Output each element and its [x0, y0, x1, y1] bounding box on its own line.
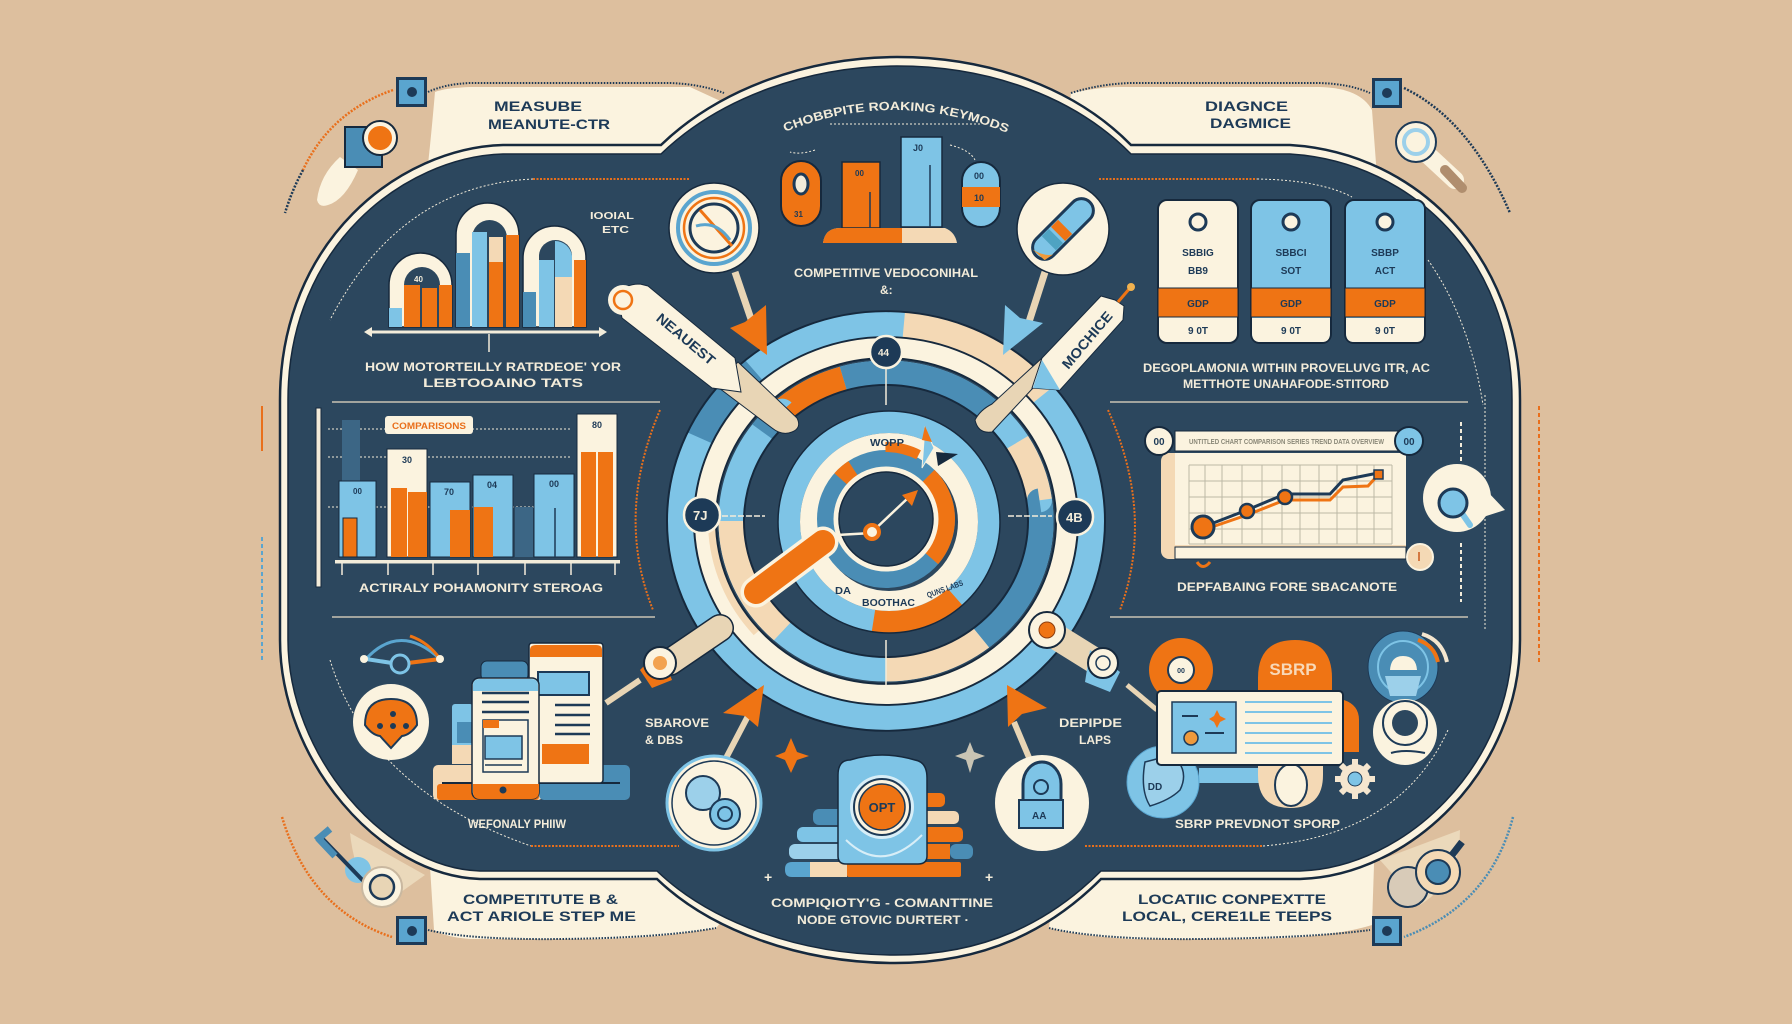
arc heading: CHOBBPITE ROAKING KEYMODS — [784, 102, 1009, 132]
label: ideal etc: IOOIAL — [590, 211, 634, 222]
card 1: BB9 — [1188, 266, 1208, 277]
banner: diagnose — [1060, 83, 1378, 190]
lock circle — [995, 755, 1089, 851]
blue circle: DD — [1148, 782, 1162, 793]
trend lines — [1203, 473, 1378, 527]
lower arrow: right — [1007, 685, 1047, 760]
arch 3 — [523, 226, 586, 327]
tag handle — [715, 362, 799, 433]
badge: right: 4B — [1066, 510, 1083, 525]
grid — [1189, 465, 1392, 544]
arch bar chart — [364, 203, 607, 352]
badge: top — [870, 336, 902, 405]
side accent: left — [261, 406, 263, 663]
caption: cards: METTHOTE UNAHAFODE-STITORD — [1183, 377, 1389, 391]
stacked card: opt: OPT — [869, 800, 895, 815]
card 1: 9 0T — [1188, 326, 1208, 337]
gauge icon — [360, 636, 444, 673]
ring labels: DA — [835, 586, 851, 597]
ring 2 — [640, 286, 1132, 756]
corner icon: bottom right gear — [1380, 830, 1462, 907]
caption: bottom centre: COMPIQIOTY'G - COMANTTINE — [771, 896, 993, 910]
pill: blue: 10 — [974, 193, 984, 203]
serp illustration — [1127, 631, 1447, 818]
card 2: GDP — [1280, 299, 1302, 310]
ring 1 — [614, 260, 1158, 782]
caption: bottom centre — [764, 869, 993, 927]
inner flag arrow — [922, 426, 958, 468]
tag: measure — [608, 284, 799, 433]
corner icon: top right magnifier — [1396, 122, 1462, 188]
arch 1 — [389, 253, 452, 327]
caption: serp: SBRP PREVDNOT SPORP — [1175, 817, 1340, 831]
mini chart: top centre — [781, 124, 1000, 243]
caption: bottom centre: + — [764, 869, 772, 885]
caption: arch chart: LEBTOOAINO TATS — [423, 376, 583, 390]
caption: cards — [1143, 361, 1430, 391]
gear — [1335, 759, 1375, 799]
tag: lower right — [1029, 612, 1157, 710]
chip: left — [1145, 427, 1173, 455]
orange handle — [756, 542, 823, 592]
top cards — [1158, 200, 1425, 343]
banner text: competitive: COMPETITUTE B & — [463, 891, 618, 907]
bar: blue — [901, 137, 942, 227]
magnifier: top left — [669, 183, 767, 355]
bar 2 — [387, 449, 427, 557]
lower arrow: left — [723, 685, 764, 760]
card — [838, 755, 927, 864]
star: pale — [955, 742, 985, 773]
outer rings — [614, 260, 1158, 782]
bar 6 — [577, 414, 617, 557]
bar 4 — [473, 475, 513, 557]
ring outlines — [667, 311, 1105, 731]
banner text: measure — [488, 98, 610, 132]
tag text: NEAUEST — [653, 310, 719, 369]
caption: line chart: DEPFABAING FORE SBACANOTE — [1177, 580, 1397, 594]
text: DEPIPDE — [1059, 716, 1122, 730]
chart label: COMPARISONS — [392, 421, 466, 431]
caption: top centre — [794, 266, 978, 297]
ring 3 — [667, 311, 1105, 731]
chip: lower — [1407, 544, 1433, 570]
captions: lower arrows: & DBS — [645, 733, 683, 747]
capsule circle: top right — [1003, 183, 1109, 355]
corner square: bottom right — [1372, 916, 1402, 946]
pill: orange: 31 — [794, 210, 803, 219]
bar 1: 00 — [353, 487, 362, 496]
serp dome — [1258, 640, 1332, 692]
ring labels: BOOTHAC — [862, 598, 915, 609]
banner text: diagnose: DIAGNCE — [1205, 98, 1288, 114]
ring labels: QUNS LABS — [926, 578, 965, 600]
caption: bottom centre: + — [985, 869, 993, 885]
bar 2: 30 — [402, 455, 412, 465]
caption: cards: DEGOPLAMONIA WITHIN PROVELUVG ITR, AC — [1143, 361, 1430, 375]
inner rings — [748, 381, 1030, 663]
left stack — [785, 809, 961, 877]
card 3: GDP — [1374, 299, 1396, 310]
caption: top centre: &: — [880, 283, 893, 297]
caption: bar chart: ACTIRALY POHAMONITY STEROAG — [359, 581, 603, 595]
tag: lower left — [606, 628, 720, 703]
banner text: competitive — [447, 891, 636, 924]
pill: orange — [781, 161, 821, 226]
base — [433, 765, 630, 800]
bar: blue: J0 — [913, 143, 923, 153]
card 1: SBBIG — [1182, 248, 1214, 259]
card 3: SBBP — [1371, 248, 1399, 259]
line chart card — [1145, 427, 1433, 570]
tag: monitor — [975, 283, 1135, 432]
banner text: measure: MEANUTE-CTR — [488, 116, 610, 132]
label: ideal etc: ETC — [602, 225, 629, 236]
ring badge — [1373, 699, 1437, 765]
badge: top: 44 — [878, 348, 890, 359]
banner text: measure: MEASUBE — [494, 98, 582, 114]
banner: measure — [425, 83, 740, 190]
chart label — [385, 416, 473, 434]
text: LAPS — [1079, 733, 1111, 747]
banner text: local: LOCATIIC CONPEXTTE — [1138, 891, 1326, 907]
star: orange — [775, 738, 809, 773]
gauge ring diagram — [614, 260, 1158, 782]
corner icon: bottom left wrench — [314, 826, 425, 907]
card 2: SOT — [1281, 266, 1301, 277]
badge: left: 7J — [693, 508, 707, 523]
captions: lower arrows — [645, 716, 709, 747]
bar: orange: 00 — [855, 169, 864, 178]
card 3 — [1345, 200, 1425, 343]
dial pointer — [837, 490, 918, 539]
card 2: SBBCI — [1275, 248, 1307, 259]
tag text: MOCHICE — [1058, 308, 1116, 372]
side accent: right — [1538, 406, 1540, 663]
corner square: top left — [396, 77, 427, 107]
corner square: top right — [1372, 78, 1402, 108]
base — [823, 228, 957, 243]
right stack — [920, 793, 973, 859]
caption: top centre: COMPETITIVE VEDOCONIHAL — [794, 266, 978, 280]
lock circle: AA — [1032, 811, 1046, 822]
blue circle — [1127, 746, 1199, 818]
tablet — [529, 643, 603, 783]
card 3: ACT — [1375, 266, 1395, 277]
label: ideal etc — [590, 211, 634, 236]
main panel — [280, 57, 1520, 963]
banner text: diagnose: DAGMICE — [1210, 115, 1291, 131]
tag body — [1032, 296, 1124, 390]
device illustration — [433, 643, 630, 800]
markers — [1192, 516, 1214, 538]
corner arcs — [282, 88, 1513, 937]
bar 1 — [339, 481, 376, 557]
bar chart: left — [328, 414, 620, 575]
banner: competitive — [428, 835, 740, 939]
caption: arch chart: HOW MOTORTEILLY RATRDEOE' YOR — [365, 360, 621, 374]
banner text: local: LOCAL, CERE1LE TEEPS — [1122, 908, 1332, 924]
caption: bottom centre: NODE GTOVIC DURTERT · — [797, 913, 969, 927]
chip: right: 00 — [1403, 437, 1415, 448]
bar 3: 70 — [444, 487, 454, 497]
ring labels — [835, 438, 965, 609]
bar 3 — [430, 482, 470, 557]
orange circle: 00 — [1177, 668, 1185, 675]
tag handle — [975, 358, 1042, 432]
corner icon: top left — [317, 121, 397, 206]
dashed guide lines — [316, 179, 1485, 846]
axis — [364, 327, 607, 352]
banner text: local — [1122, 891, 1332, 924]
banner text: competitive: ACT ARIOLE STEP ME — [447, 908, 636, 924]
serp panel — [1157, 691, 1343, 765]
pill: blue — [962, 162, 1000, 227]
bar 5: 00 — [549, 479, 559, 489]
card 2 — [1251, 200, 1331, 343]
chip: left: 00 — [1153, 437, 1165, 448]
banner: local — [1049, 835, 1375, 939]
card 1: GDP — [1187, 299, 1209, 310]
lens circle — [667, 756, 761, 850]
bar 6: 80 — [592, 420, 602, 430]
orange circle — [1149, 638, 1213, 702]
bar: orange — [842, 162, 880, 228]
serp dome: SBRP — [1269, 660, 1317, 679]
card 1 — [1158, 200, 1238, 343]
stacked card: opt — [785, 755, 973, 877]
badge: left — [684, 497, 765, 533]
chip: right — [1395, 427, 1423, 455]
arch 1: 40 — [414, 275, 423, 284]
line chart card: UNTITLED CHART COMPARISON SERIES TREND DATA OVERVIEW — [1189, 439, 1384, 446]
corner square: bottom left — [396, 916, 427, 945]
rings icon — [1368, 631, 1447, 703]
caption: device: WEFONALY PHIIW — [468, 817, 567, 831]
caption: arch chart — [365, 360, 621, 390]
badge: right — [1008, 499, 1093, 535]
magnifier bubble — [1423, 464, 1505, 532]
card 3: 9 0T — [1375, 326, 1395, 337]
banner text: diagnose — [1205, 98, 1291, 131]
bar 4: 04 — [487, 480, 497, 490]
tag body — [618, 284, 741, 392]
bar 5 — [534, 474, 574, 557]
pill: blue: 00 — [974, 171, 984, 181]
orange shield badge — [353, 684, 429, 760]
phone — [472, 678, 539, 799]
captions: lower arrows: SBAROVE — [645, 716, 709, 730]
back panel — [452, 661, 528, 764]
axis — [335, 560, 620, 575]
arch 2 — [456, 203, 519, 327]
lower pieces — [1199, 700, 1359, 808]
ring labels: WOPP — [870, 438, 904, 449]
card 2: 9 0T — [1281, 326, 1301, 337]
